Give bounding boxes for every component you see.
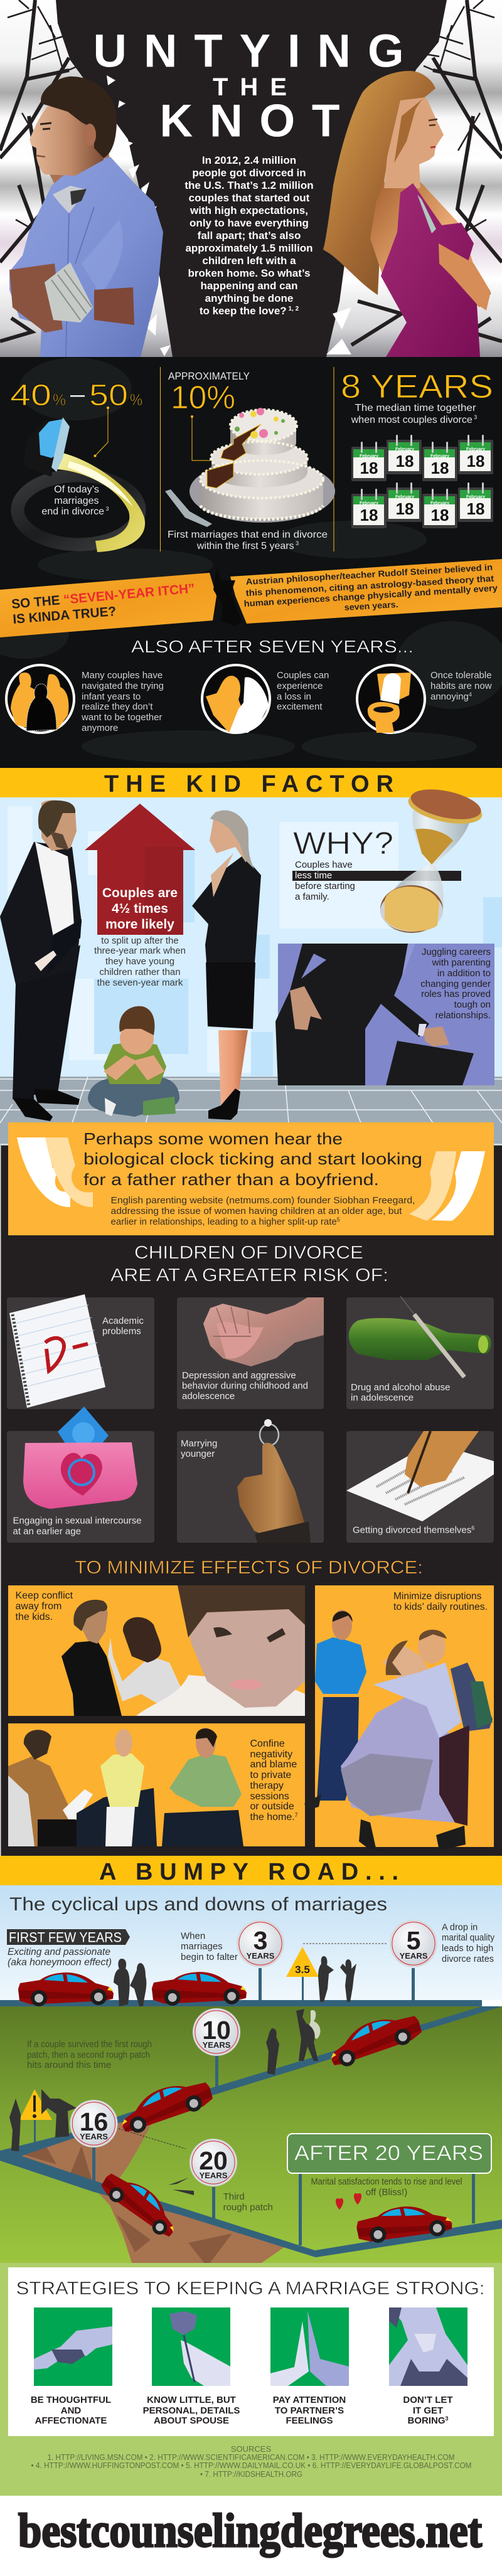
panel: juggling careers: Juggling careers xyxy=(422,947,491,957)
card: depression and aggression: Depression and aggressive xyxy=(182,1370,296,1381)
text: drop in marital quality xyxy=(442,1923,495,1964)
text: infant years: Many couples have xyxy=(82,670,163,681)
intro paragraph: fall apart; that’s also xyxy=(198,230,301,242)
caption: cake: First marriages that end in divorce xyxy=(168,530,328,540)
icon: calendars: 18 xyxy=(396,499,414,518)
why heading and text: before starting xyxy=(295,881,355,891)
tag: first few years xyxy=(7,1929,130,1968)
panel: juggling careers: tough on xyxy=(454,999,491,1010)
sign: 5 years xyxy=(390,1920,437,2000)
text: second rough patch xyxy=(27,2039,152,2070)
divider lines xyxy=(161,367,334,551)
text: annoying habits: Once tolerable xyxy=(430,670,492,681)
heading band: the kid factor: THE KID FACTOR xyxy=(104,771,393,797)
heading: children of divorce xyxy=(110,1243,388,1285)
card: getting divorced: Getting divorced themselves xyxy=(353,1525,471,1536)
panel: strategies and sources xyxy=(0,2263,502,2496)
strategy captions: BE THOUGHTFUL xyxy=(31,2395,111,2405)
text: drop in marital quality: divorce rates xyxy=(442,1954,494,1964)
card: getting divorced xyxy=(346,1431,494,1543)
icon: broken wedding ring xyxy=(18,417,145,552)
callout: quote xyxy=(8,1122,494,1235)
text: split up after three-year mark: they have young xyxy=(105,956,174,967)
card: sexual intercourse: at an earlier age xyxy=(13,1526,81,1537)
intro paragraph: with high expectations, xyxy=(190,205,308,216)
banner: seven-year itch: this phenomenon, citing an astrology-based theory that xyxy=(245,573,494,598)
icon: bored couple xyxy=(202,665,270,733)
intro paragraph: approximately 1.5 million xyxy=(185,242,313,254)
card: depression and aggression xyxy=(177,1297,324,1409)
icon: rose in hand xyxy=(152,2307,230,2386)
icon: hearts xyxy=(336,2193,361,2210)
card: drug and alcohol: Drug and alcohol abuse xyxy=(351,1382,450,1393)
card: depression and aggression: behavior during childhood and xyxy=(182,1380,308,1392)
text: second rough patch: hits around this time xyxy=(27,2060,111,2070)
intro paragraph: people got divorced in xyxy=(192,167,306,179)
text: loss in excitement: experience xyxy=(277,681,323,691)
icon: calendars xyxy=(351,435,493,528)
heading: cyclical ups and downs: The cyclical ups and downs of marriages xyxy=(9,1894,387,1915)
icon: calendars: February xyxy=(395,447,414,452)
card: academic problems: Academic xyxy=(102,1316,144,1326)
text: split up after three-year mark: children rather than xyxy=(99,967,181,977)
sign: 5 years: YEARS xyxy=(400,1951,428,1961)
banner: seven-year itch: Austrian philosopher/teacher Rudolf Steiner believed in xyxy=(245,562,493,587)
text: infant years: want to be together xyxy=(81,712,162,723)
heading: to minimize effects: TO MINIMIZE EFFECTS OF DIVORCE: xyxy=(75,1558,423,1578)
intro paragraph: to keep the love? xyxy=(200,305,287,317)
strategy captions: ABOUT SPOUSE xyxy=(154,2415,229,2426)
title: Untying the Knot: KNOT xyxy=(159,95,340,147)
caption: cake xyxy=(168,530,328,551)
why heading and text: less time xyxy=(295,870,332,881)
text: marriages begin to falter: begin to falter xyxy=(181,1952,238,1962)
arrow: couples more likely: more likely xyxy=(105,917,174,932)
strategy captions: TO PARTNER’S xyxy=(275,2405,344,2416)
tag: first few years: FIRST FEW YEARS xyxy=(9,1930,122,1945)
panel: dark children section xyxy=(0,1122,502,1856)
text: annoying habits xyxy=(430,670,492,702)
heading: children of divorce: CHILDREN OF DIVORCE xyxy=(134,1243,363,1263)
callout: quote: earlier in relationships, leading to a higher split-up rate xyxy=(110,1216,337,1227)
text: third rough patch xyxy=(223,2191,273,2213)
icon: calendars: 18 xyxy=(467,452,484,471)
panel: confine negativity to therapy: Confine xyxy=(250,1738,285,1749)
ring caption xyxy=(41,484,109,517)
tag: first few years: (aka honeymoon effect) xyxy=(8,1957,112,1968)
stat: 40-50 percent: 50 xyxy=(89,379,128,412)
icon: calendars: 18 xyxy=(360,506,378,524)
intro paragraph: couples that started out xyxy=(189,192,310,204)
card: drug and alcohol xyxy=(346,1296,494,1409)
panel: minimize disruptions: Minimize disruptions xyxy=(393,1591,482,1602)
silhouette: happy couple xyxy=(114,1959,146,2006)
text: infant years: realize they don’t xyxy=(82,701,153,712)
text: loss in excitement: excitement xyxy=(277,701,323,712)
panel: statistics dark section xyxy=(0,357,502,768)
text: marital satisfaction xyxy=(311,2176,462,2198)
sign: 3 years: 3 xyxy=(254,1926,267,1955)
intro paragraph: In 2012, 2.4 million xyxy=(202,154,296,166)
smoke xyxy=(309,2010,320,2039)
card: sexual intercourse: Engaging in sexual intercourse xyxy=(13,1516,142,1526)
icon: calendars: February xyxy=(360,454,378,459)
callout: quote: Perhaps some women hear the xyxy=(83,1129,343,1148)
text: split up after three-year mark: the seven-year mark xyxy=(97,977,183,988)
road and cliffs xyxy=(0,2006,502,2267)
car: falling off cliff xyxy=(97,2165,184,2242)
strategy captions: IT GET xyxy=(413,2405,443,2416)
strategy captions xyxy=(31,2395,453,2426)
sources: 1. HTTP://LIVING.MSN.COM • 2. HTTP://WWW.SCIENTIFICAMERICAN.COM • 3. HTTP://WWW.EVERYDAYHEALTH.COM xyxy=(48,2452,454,2462)
text: marriages begin to falter: marriages xyxy=(181,1941,223,1952)
intro paragraph: 1, 2 xyxy=(287,306,299,312)
why heading and text: a family. xyxy=(295,891,329,902)
text: drop in marital quality: leads to high xyxy=(442,1944,493,1954)
text: annoying habits: habits are now xyxy=(430,681,492,691)
text: split up after three-year mark: three-year mark when xyxy=(94,945,186,956)
panel: confine negativity to therapy: 7 xyxy=(295,1812,298,1818)
sources xyxy=(31,2444,472,2479)
icon: woman covering eyes xyxy=(389,2307,467,2386)
card: marrying younger xyxy=(177,1419,324,1543)
text: infant years: navigated the trying xyxy=(82,681,164,691)
silhouette: arguing couple xyxy=(318,1956,356,2002)
icon: calendars: 18 xyxy=(360,459,378,477)
title: Untying the Knot xyxy=(93,25,404,147)
panel: keep conflict away: Keep conflict xyxy=(15,1590,73,1601)
sign: 20 years xyxy=(190,2139,237,2220)
intro paragraph: children left with a xyxy=(202,255,296,267)
icon: toilet xyxy=(357,665,425,733)
sign: 10 years xyxy=(193,2008,240,2087)
sign: 3 years: YEARS xyxy=(247,1951,275,1961)
intro paragraph: the U.S. That’s 1.2 million xyxy=(184,179,314,191)
icon: calendars: February xyxy=(466,495,485,499)
panel: minimize disruptions xyxy=(304,1585,494,1851)
intro paragraph: happening and can xyxy=(201,280,297,292)
sources: SOURCES xyxy=(231,2444,271,2454)
intro paragraph: broken home. So what’s xyxy=(188,267,310,279)
stat: 8 years: when most couples divorce xyxy=(351,415,473,425)
stat: 8 years xyxy=(341,368,493,425)
panel: the kid factor xyxy=(0,768,502,1146)
stat: 10 percent: APPROXIMATELY xyxy=(168,370,250,382)
icon: wedding cake xyxy=(165,408,335,527)
sign: 20 years: YEARS xyxy=(200,2171,228,2180)
text: loss in excitement: Couples can xyxy=(277,670,329,681)
stat: 40-50 percent: % xyxy=(53,390,66,409)
banner: seven-year itch xyxy=(0,559,502,637)
banner: seven-year itch: human experiences change physically and mentally every xyxy=(243,583,498,609)
callout: quote: English parenting website (netmums.com) founder Siobhan Freegard, xyxy=(110,1195,415,1206)
ring caption: marriages xyxy=(54,496,99,506)
panel: juggling careers: relationships. xyxy=(435,1010,491,1021)
caption: cake: within the first 5 years xyxy=(197,541,294,551)
callout: quote: 5 xyxy=(337,1216,340,1223)
text: loss in excitement xyxy=(277,670,329,712)
sign: 3.5 warning: 3.5 xyxy=(295,1964,310,1976)
panel: confine negativity to therapy: to private xyxy=(250,1770,291,1780)
ring caption: 3 xyxy=(104,506,109,512)
title: Untying the Knot: UNTYING xyxy=(93,25,404,77)
sign: after 20 years xyxy=(287,2134,491,2245)
card: marrying younger: younger xyxy=(181,1449,215,1459)
arrow: couples more likely xyxy=(85,804,195,935)
why heading and text: WHY? xyxy=(293,826,393,861)
ring caption: Of today’s xyxy=(54,484,99,495)
panel: keep conflict away xyxy=(8,1585,305,1716)
card: drug and alcohol: in adolescence xyxy=(351,1393,414,1403)
stat: 8 years: 3 xyxy=(473,414,477,420)
callout: quote: biological clock ticking and start looking xyxy=(83,1149,422,1168)
strategy captions: KNOW LITTLE, BUT xyxy=(147,2395,236,2405)
figure: sad boy xyxy=(88,1006,179,1117)
ring caption: end in divorce xyxy=(41,506,104,517)
card: academic problems xyxy=(7,1294,154,1409)
text: split up after three-year mark xyxy=(94,935,186,988)
sign: after 20 years: AFTER 20 YEARS xyxy=(294,2141,483,2164)
sources: • 7. HTTP://KIDSHEALTH.ORG xyxy=(200,2469,302,2479)
text: annoying habits: 4 xyxy=(469,691,472,698)
text: infant years: infant years to xyxy=(82,691,141,702)
panel: confine negativity to therapy: the home. xyxy=(250,1812,295,1823)
banner: seven-year itch: seven years. xyxy=(344,599,398,612)
caption: cake: 3 xyxy=(294,540,299,546)
panel: minimize disruptions: to kids’ daily routines. xyxy=(393,1602,488,1612)
heading: children of divorce: ARE AT A GREATER RISK OF: xyxy=(110,1265,388,1285)
sign: 16 years: YEARS xyxy=(80,2132,108,2141)
icon: calendars: February xyxy=(466,447,485,452)
panel: confine negativity to therapy: or outside xyxy=(250,1801,294,1812)
heading band: a bumpy road: A BUMPY ROAD... xyxy=(99,1859,398,1885)
sign: 10 years: YEARS xyxy=(203,2040,231,2050)
strategy captions: 3 xyxy=(445,2415,449,2422)
man in blue shirt xyxy=(9,77,163,357)
intro paragraph xyxy=(184,154,314,317)
banner: seven-year itch: SO THE “SEVEN-YEAR ITCH” xyxy=(11,582,195,612)
stat: 8 years: The median time together xyxy=(355,403,476,413)
car: second xyxy=(152,1972,247,2006)
card: academic problems: problems xyxy=(102,1326,141,1336)
heading band: a bumpy road xyxy=(0,1856,502,1885)
icon: hourglass xyxy=(380,784,486,933)
icon: calendars: 18 xyxy=(396,452,414,471)
panel: confine negativity to therapy: sessions xyxy=(250,1791,289,1802)
panel: confine negativity to therapy: therapy xyxy=(250,1780,284,1791)
car: broken down with hood up xyxy=(324,2005,425,2072)
car: on slope xyxy=(115,2072,216,2139)
sign: 10 years: 10 xyxy=(202,2016,231,2045)
title: Untying the Knot: THE xyxy=(213,73,287,101)
panel: confine negativity to therapy: and blame xyxy=(250,1759,297,1770)
icon: calendars: 18 xyxy=(431,459,449,477)
figure: woman in black suit xyxy=(192,810,261,1120)
panel: keep conflict away: the kids. xyxy=(15,1612,53,1622)
panel: hero xyxy=(0,0,502,358)
sign: 3.5 warning xyxy=(286,1947,319,2000)
heading: strategies: STRATEGIES TO KEEPING A MARRIAGE STRONG: xyxy=(16,2279,484,2299)
impact marks xyxy=(168,2178,194,2195)
text: third rough patch: Third xyxy=(223,2191,245,2202)
panel: a bumpy road xyxy=(0,1856,502,2267)
strategy captions: FEELINGS xyxy=(286,2415,333,2426)
text: infant years xyxy=(81,670,164,733)
icon: couple with child silhouette xyxy=(6,665,74,733)
sign: 16 years: 16 xyxy=(80,2107,108,2136)
heading band: the kid factor xyxy=(0,768,502,797)
stat: 40-50 percent: 40 xyxy=(10,379,51,412)
panel: keep conflict away: away from xyxy=(15,1601,61,1612)
text: marital satisfaction: Marital satisfaction tends to rise and level xyxy=(311,2176,462,2187)
icon: holding hands xyxy=(34,2307,112,2386)
panel: juggling careers: roles has proved xyxy=(421,989,491,999)
arrow: couples more likely: 4½ times xyxy=(112,902,168,916)
text: second rough patch: patch, then a second rough patch xyxy=(27,2050,150,2060)
text: drop in marital quality: marital quality xyxy=(442,1933,495,1943)
silhouettes: man and woman beside broken car xyxy=(266,2009,318,2075)
sign: 5 years: 5 xyxy=(407,1926,420,1955)
warning sign xyxy=(19,2089,52,2144)
text: marriages begin to falter: When xyxy=(181,1931,205,1941)
sign: 3 years xyxy=(237,1920,284,2000)
intro paragraph: anything be done xyxy=(205,292,293,304)
card: getting divorced: 6 xyxy=(471,1525,474,1531)
why heading and text: Couples have xyxy=(295,860,353,870)
why heading and text xyxy=(292,826,461,902)
strategy captions: BORING xyxy=(407,2415,445,2426)
text: loss in excitement: a loss in xyxy=(277,691,311,702)
strategy captions: DON’T LET xyxy=(403,2395,453,2405)
strategy captions: AFFECTIONATE xyxy=(35,2415,107,2426)
banner: seven-year itch: IS KINDA TRUE? xyxy=(13,604,117,627)
panel: confine negativity to therapy xyxy=(8,1723,305,1846)
silhouettes: couple at cliff xyxy=(9,2089,77,2151)
text: split up after three-year mark: to split up after the xyxy=(101,935,179,946)
woman in magenta dress xyxy=(323,71,491,357)
central dark panel xyxy=(56,0,447,357)
arrow: couples more likely: Couples are xyxy=(102,886,178,900)
text: marriages begin to falter xyxy=(181,1931,238,1962)
icon: calendars: February xyxy=(395,495,414,499)
callout: quote: for a father rather than a boyfriend. xyxy=(83,1170,379,1189)
stat: 8 years: 8 YEARS xyxy=(341,368,493,405)
icon: calendars: February xyxy=(360,501,378,506)
car: after 20 years xyxy=(355,2203,453,2245)
stat: 10 percent: 10% xyxy=(171,380,235,416)
panel: juggling careers: in addition to xyxy=(437,968,491,979)
text: drop in marital quality: A drop in xyxy=(442,1923,478,1933)
text: marital satisfaction: off (Bliss!) xyxy=(366,2187,407,2198)
icon: hands touching xyxy=(270,2307,349,2386)
callout: quote: addressing the issue of women having children at an older age, but xyxy=(110,1206,402,1216)
stat: 40-50 percent xyxy=(10,379,142,457)
icon: calendars: 18 xyxy=(467,499,484,518)
panel: confine negativity to therapy: negativity xyxy=(250,1749,292,1760)
strategy captions: PERSONAL, DETAILS xyxy=(143,2405,240,2416)
figure: man in black suit xyxy=(0,800,82,1121)
card: marrying younger: Marrying xyxy=(181,1439,217,1449)
text: second rough patch: If a couple survived the first rough xyxy=(27,2039,152,2050)
stat: 40-50 percent: % xyxy=(130,390,142,409)
icon: calendars: 18 xyxy=(431,506,449,524)
icon: calendars: February xyxy=(430,454,449,459)
text: third rough patch: rough patch xyxy=(223,2202,273,2213)
panel: juggling careers: with parenting xyxy=(432,957,491,968)
stat: 10 percent xyxy=(168,370,250,460)
tag: first few years: Exciting and passionate xyxy=(8,1947,110,1957)
text: infant years: anymore xyxy=(82,723,118,733)
card: sexual intercourse xyxy=(7,1407,154,1543)
sign: 16 years xyxy=(70,2100,118,2185)
car: first xyxy=(18,1972,114,2006)
card: depression and aggression: adolescence xyxy=(182,1391,235,1402)
panel: juggling careers xyxy=(275,944,494,1085)
panel: juggling careers: changing gender xyxy=(420,979,491,989)
text: annoying habits: annoying xyxy=(430,691,469,702)
strategy captions: PAY ATTENTION xyxy=(273,2395,346,2405)
intro paragraph: only to have everything xyxy=(190,217,309,229)
icon: calendars: February xyxy=(430,501,449,506)
heading: also after seven years: ALSO AFTER SEVEN YEARS... xyxy=(131,637,414,656)
sign: 20 years: 20 xyxy=(199,2146,228,2175)
strategy captions: AND xyxy=(61,2405,81,2416)
